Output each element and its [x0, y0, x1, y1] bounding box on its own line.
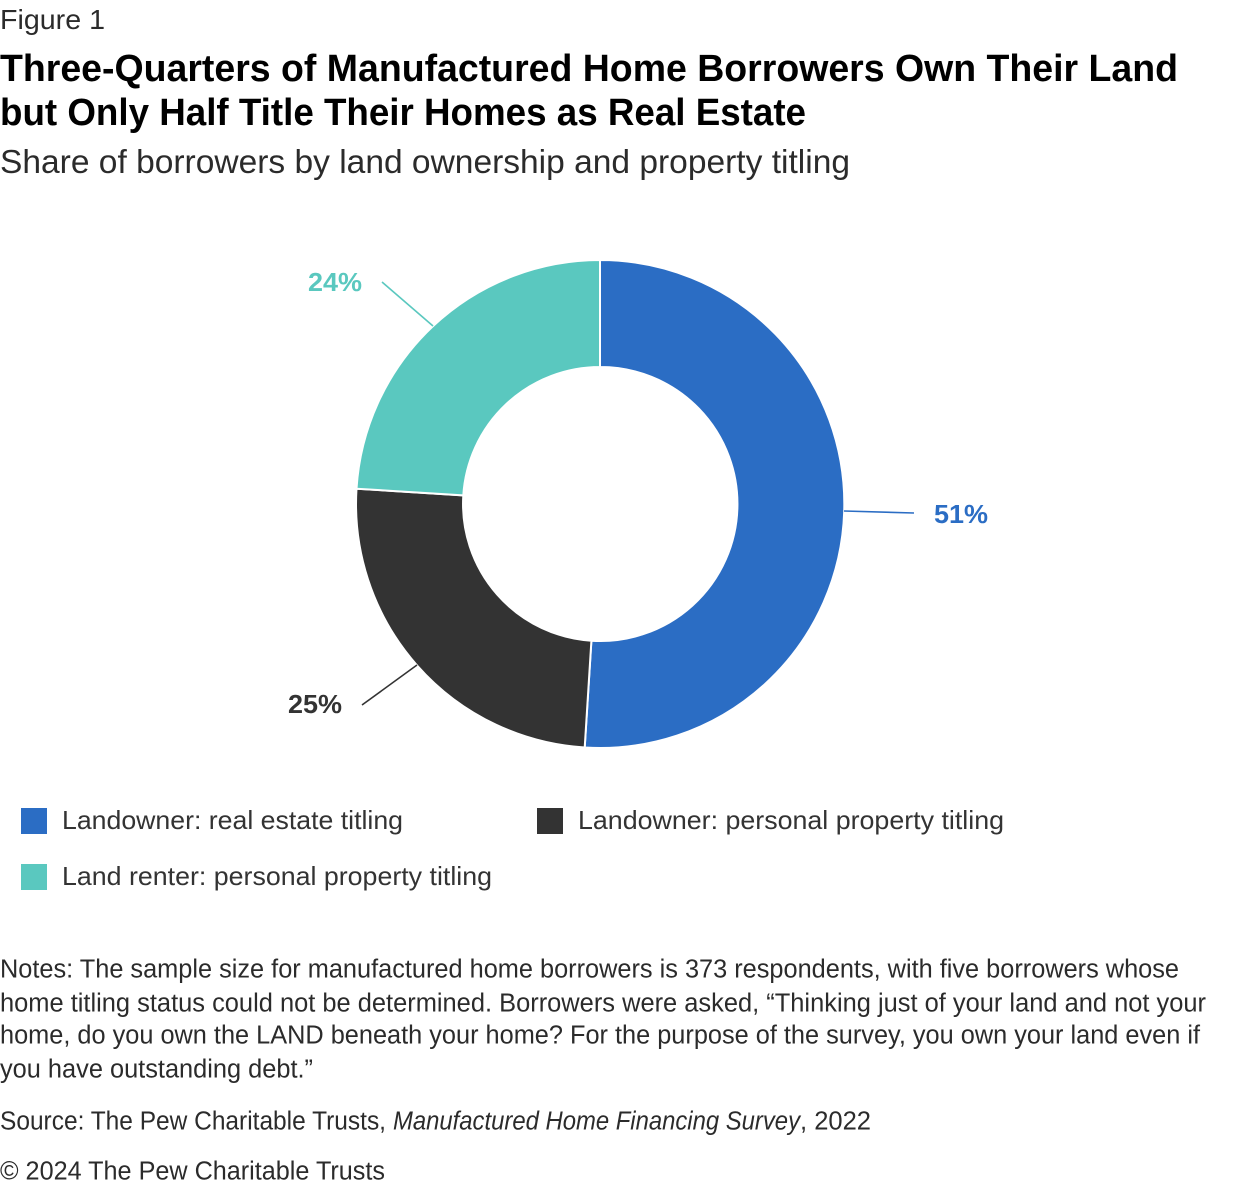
- source: Manufactured Home Financing Survey: [393, 1108, 802, 1136]
- copyright: © 2024 The Pew Charitable Trusts: [0, 1158, 385, 1186]
- notes: [0, 956, 1207, 1084]
- legend item: land renter personal property titling: Land renter: personal property titling: [62, 861, 492, 891]
- notes: home titling status could not be determined. Borrowers were asked, “Thinking just of your land and not your: [0, 990, 1207, 1018]
- segment: landowner real estate 51%: [585, 260, 844, 748]
- title: but Only Half Title Their Homes as Real Estate: [0, 92, 806, 134]
- callout: 51%: 51%: [934, 499, 988, 529]
- notes: Notes: The sample size for manufactured home borrowers is 373 respondents, with five borrowers whose: [0, 956, 1179, 984]
- legend: [21, 805, 1004, 891]
- source: Source: The Pew Charitable Trusts,: [0, 1108, 386, 1136]
- segment: land renter personal property 24%: [356, 260, 600, 495]
- callout: 24%: 24%: [308, 267, 362, 297]
- title: [0, 48, 1178, 134]
- legend item: landowner real estate titling: Landowner: real estate titling: [62, 805, 403, 835]
- subtitle: Share of borrowers by land ownership and property titling: [0, 143, 850, 180]
- donut chart: [356, 260, 844, 748]
- notes: you have outstanding debt.”: [0, 1056, 313, 1084]
- callout: 25%: [288, 665, 417, 719]
- callout: 25%: 25%: [288, 689, 342, 719]
- figure label: Figure 1: [0, 4, 105, 35]
- callout: 24%: [308, 267, 433, 326]
- source: , 2022: [800, 1108, 871, 1136]
- source: [0, 1108, 871, 1136]
- segment: landowner personal property 25%: [356, 489, 591, 748]
- notes: home, do you own the LAND beneath your home? For the purpose of the survey, you own your land even if: [0, 1022, 1201, 1050]
- legend item: landowner personal property titling: Landowner: personal property titling: [578, 805, 1004, 835]
- title: Three-Quarters of Manufactured Home Borrowers Own Their Land: [0, 48, 1178, 90]
